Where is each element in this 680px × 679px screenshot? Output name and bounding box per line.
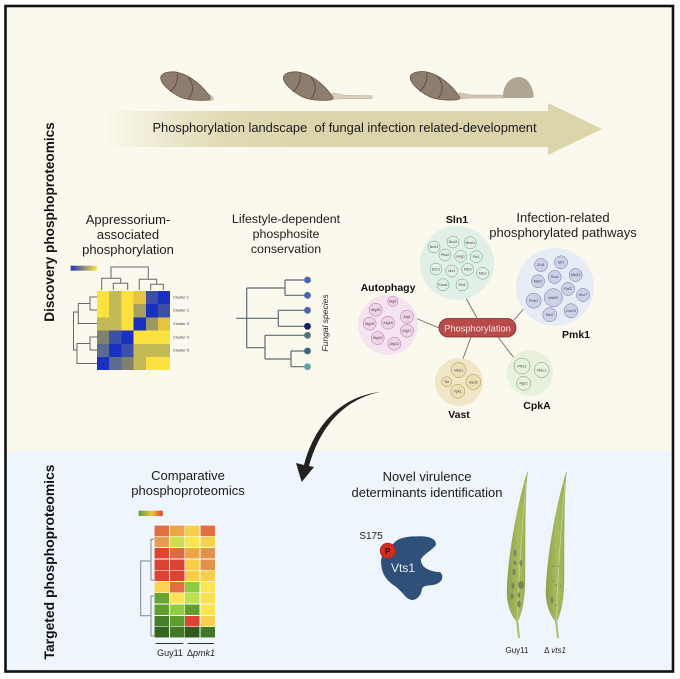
phospho marker: P <box>385 547 391 556</box>
label: CpkA: CpkA <box>523 400 551 412</box>
cluster: Autophagy: Atg1 <box>403 315 411 319</box>
cluster labels: Cluster 2 <box>173 308 190 312</box>
cluster: Autophagy: Atg29 <box>373 336 382 340</box>
cluster: Sln1: Sho1 <box>432 267 440 271</box>
cluster: Pmk1: Sfl1 <box>558 260 564 264</box>
heading: lifestyle-dependent phosphosite conservation: Lifestyle-dependent <box>232 212 341 226</box>
cluster: Pmk1: Pmk1 <box>529 299 538 303</box>
cluster: Vast: Tor <box>444 380 450 384</box>
sample labels: Guy11 and pmk1: Δpmk1 <box>187 648 215 658</box>
cluster: Vast: Ypk1 <box>454 390 462 394</box>
colour legend: green to red <box>139 511 163 516</box>
heading: appressorium-associated phosphorylation: Appressorium- <box>86 212 170 227</box>
cluster: Pmk1: Ral2 <box>564 287 572 291</box>
cluster: Sln1: Sum1 <box>438 283 448 287</box>
label: Autophagy: Autophagy <box>361 282 416 294</box>
leaf: Guy11 <box>507 472 528 638</box>
cluster: Pmk1: Cdc24 <box>566 309 576 313</box>
cluster: Sln1: Pbs2 <box>441 253 449 257</box>
heading: discovery phosphoproteomics: Discovery phosphoproteomics <box>42 122 57 322</box>
cluster labels: Cluster 1 <box>173 294 190 300</box>
sample label: Guy11 leaf: Guy11 <box>506 646 529 655</box>
cluster: Sln1 <box>420 226 494 300</box>
colour legend: blue to yellow <box>71 266 97 271</box>
cluster: Pmk1: Mst12 <box>571 273 581 277</box>
heading: comparative phosphoproteomics: Comparative <box>151 468 225 483</box>
cluster: CpkA: Pth11 <box>517 364 527 368</box>
cluster: Autophagy: Atg17 <box>402 329 412 333</box>
label: S175: S175 <box>359 531 383 542</box>
phylogenetic tree <box>236 277 311 370</box>
heading: lifestyle-dependent phosphosite conservation: conservation <box>251 242 321 256</box>
heading: targeted phosphoproteomics: Targeted phosphoproteomics <box>41 464 57 660</box>
phospho marker <box>380 543 395 558</box>
timeline arrow: Phosphorylation landscape of fungal infection related-development <box>152 120 537 135</box>
cluster: Autophagy: Atg13 <box>390 342 399 346</box>
heading: comparative phosphoproteomics: phosphoproteomics <box>131 483 245 498</box>
sample labels: Guy11 and pmk1 <box>156 644 215 658</box>
cluster: Vast: Vast1 <box>454 368 463 372</box>
label: Pmk1: Pmk1 <box>562 329 590 341</box>
cluster: Pmk1 <box>516 248 594 326</box>
protein: Vts1 <box>382 537 442 599</box>
panel: discovery background <box>5 6 673 451</box>
cluster: Pmk1: Zrd1 <box>537 263 545 267</box>
cluster: Autophagy: Atg26 <box>371 308 380 312</box>
cluster: CpkA: Rgs1 <box>520 382 528 386</box>
cluster: Pmk1: Mst7 <box>546 313 554 317</box>
cluster: Pmk1: Mst50 <box>548 296 558 300</box>
cluster: Sln1: Ptc1 <box>473 255 480 259</box>
network connectors <box>413 291 527 364</box>
heading: lifestyle-dependent phosphosite conservation: phosphosite <box>253 227 320 241</box>
panel: targeted background <box>5 451 673 671</box>
cluster: Sln1: Sln1 <box>458 283 466 287</box>
leaf: vts1 mutant <box>546 472 566 638</box>
cluster: Sln1: Bem1 <box>466 241 475 245</box>
cluster: Sln1: Mic1 <box>479 272 486 276</box>
cluster: Sln1: Nox3 <box>430 245 438 249</box>
heading: novel virulence determinants identification: determinants identification <box>351 485 503 500</box>
heading: infection-related phosphorylated pathways: Infection-related <box>516 210 610 225</box>
cluster: Sln1: Hog1 <box>456 254 465 258</box>
heading: infection-related phosphorylated pathways: phosphorylated pathways <box>489 225 637 240</box>
cluster: Vast <box>435 358 483 406</box>
spore stage 3 with appressorium <box>410 72 534 100</box>
timeline arrow <box>100 103 602 155</box>
cluster labels: Cluster 4 <box>173 334 190 340</box>
cluster: Pmk1: Msb2 <box>534 280 542 284</box>
cluster: CpkA <box>507 350 553 396</box>
cluster: Pmk1: Hox7 <box>579 293 587 297</box>
sample label: vts1 leaf: Δ vts1 <box>544 646 566 655</box>
cluster: Autophagy: Atg18 <box>383 321 393 325</box>
phosphorylation hub <box>439 318 516 337</box>
label: fungal species: Fungal species <box>320 294 330 352</box>
spore stage 2 <box>283 72 372 100</box>
cluster: CpkA: Mac1 <box>537 368 546 372</box>
heatmap: comparative <box>154 525 215 638</box>
cluster: Vast: Vast2 <box>469 380 478 384</box>
cluster: Sln1: Mic3 <box>464 268 471 272</box>
heading: appressorium-associated phosphorylation: phosphorylation <box>82 242 174 257</box>
curved arrow <box>296 392 380 482</box>
heatmap: clusters <box>97 291 170 370</box>
cluster: Pmk1: Sho1 <box>550 275 559 279</box>
label: Sln1: Sln1 <box>446 214 468 226</box>
label: Vast: Vast <box>448 409 470 421</box>
spore stage 1 <box>161 72 213 100</box>
cluster labels: Cluster 5 <box>173 348 190 352</box>
phosphorylation hub: Phosphorylation <box>444 323 511 333</box>
cluster: Autophagy <box>358 295 418 355</box>
sample labels: Guy11 and pmk1: Guy11 <box>157 648 183 658</box>
cluster: Autophagy: Atg28 <box>365 322 374 326</box>
cluster: Autophagy: Atg6 <box>389 300 396 304</box>
heading: appressorium-associated phosphorylation: associated <box>97 227 159 242</box>
heading: novel virulence determinants identification: Novel virulence <box>383 469 471 484</box>
dendrogram: heatmap top and left <box>74 267 163 364</box>
dendrogram: comparative <box>141 539 154 636</box>
cluster: Sln1: Ids1 <box>448 269 455 273</box>
cluster labels: Cluster 3 <box>173 321 190 326</box>
protein: Vts1: Vts1 <box>391 561 415 575</box>
cluster: Sln1: Nox2 <box>449 240 457 244</box>
